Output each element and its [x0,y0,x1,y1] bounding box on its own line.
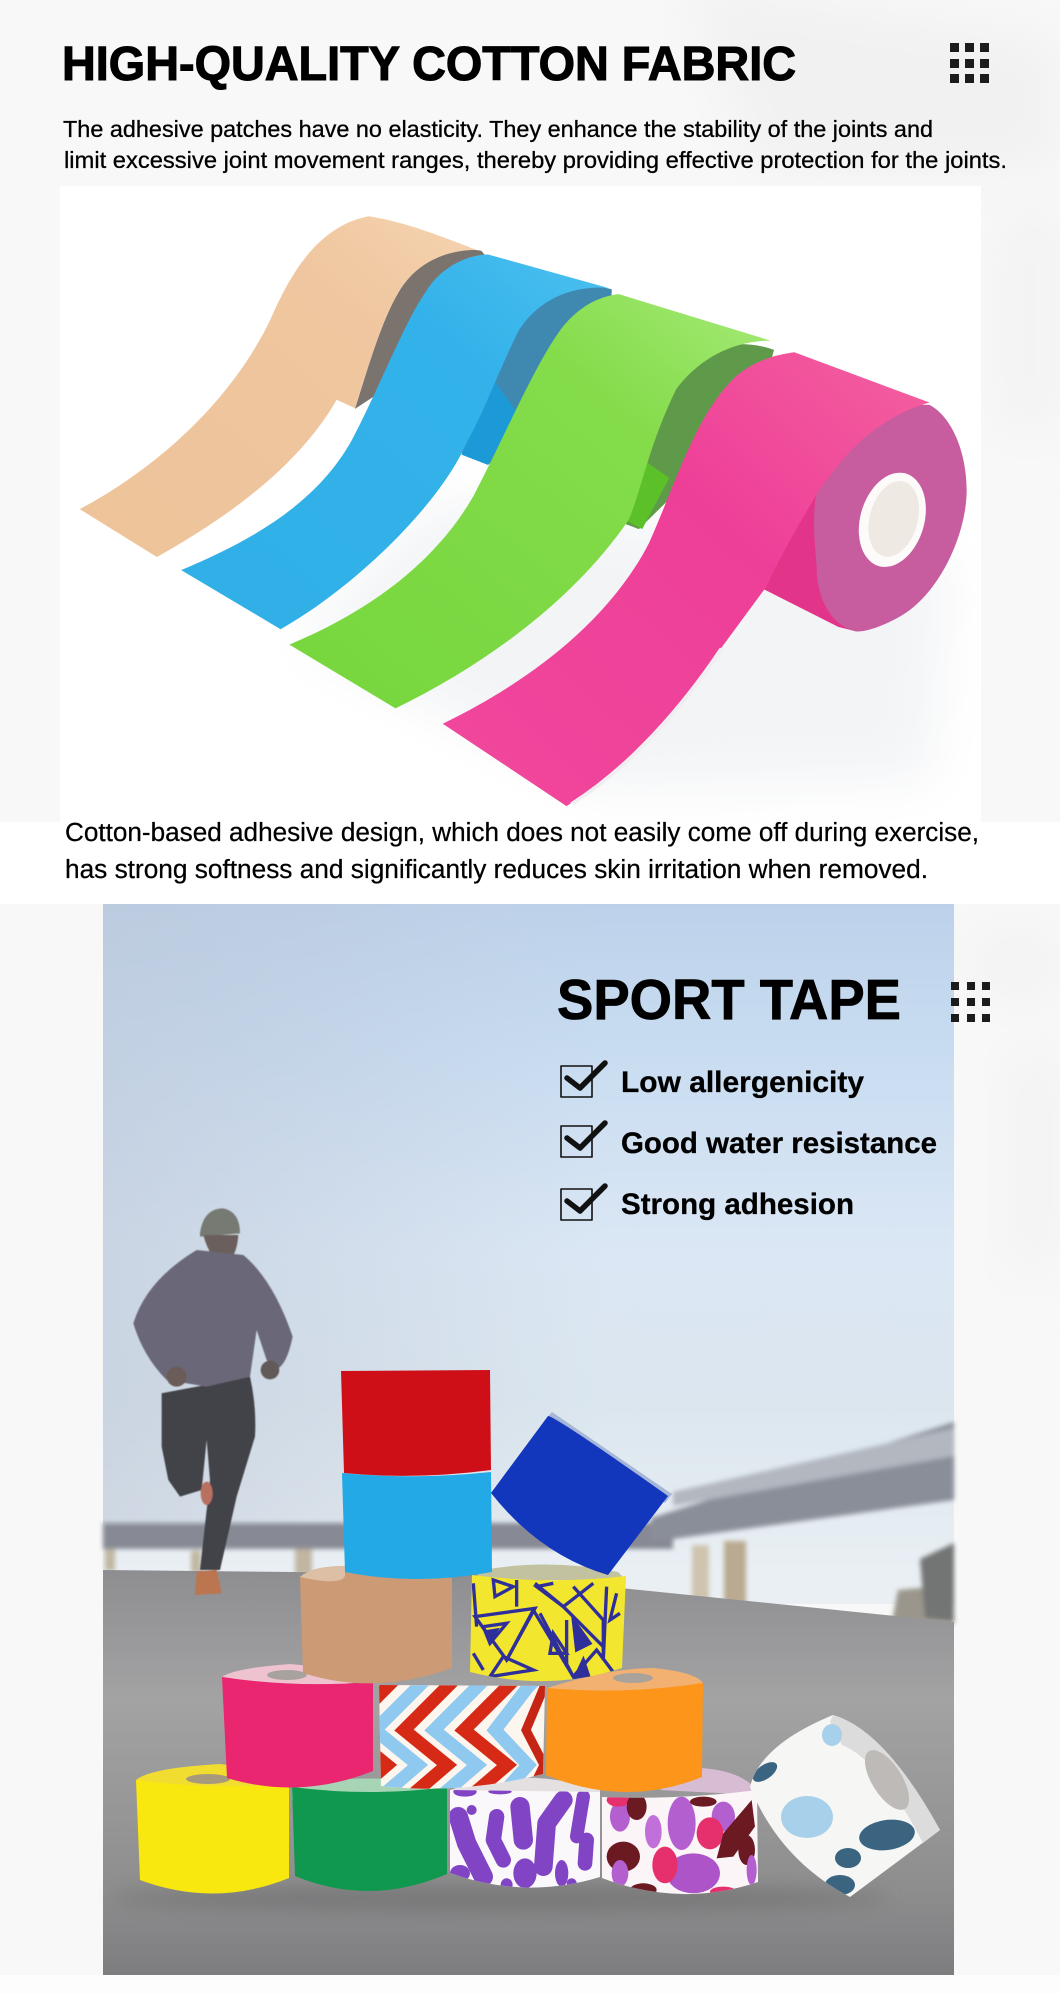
panel: sport tape photo [103,904,954,1975]
royal blue tilted roll [491,1412,672,1575]
text: cotton-based adhesive design: Cotton-based adhesive design, which does not easily come off during exercise, [65,819,979,847]
beige tape roll [80,216,500,557]
tan roll [300,1566,452,1683]
text: cotton-based adhesive design [65,819,979,884]
green tape roll [289,294,774,708]
red roll [341,1370,491,1476]
label: strong adhesion: Strong adhesion [621,1188,854,1221]
road and guard rail background [103,1422,954,1975]
chevron pattern roll [379,1685,545,1789]
text: adhesive patches description: The adhesive patches have no elasticity. They enhance the stability of the joints and [63,116,933,142]
icon: dot grid top [950,43,989,83]
icon: checkbox low allergenicity [561,1063,605,1097]
runner [133,1208,293,1595]
feature list [561,1063,937,1221]
soft shadow under tapes [110,1885,890,1911]
text: cotton-based adhesive design: has strong softness and significantly reduces skin irritation when removed. [65,856,928,884]
icon: dot grid sport tape [951,982,990,1022]
cyan roll [342,1472,492,1579]
yellow roll [136,1764,289,1894]
purple pattern roll [450,1778,600,1892]
orange roll [546,1668,703,1792]
panel: four tape rolls photo [60,186,981,822]
pink roll [222,1664,373,1787]
title: high-quality cotton fabric: HIGH-QUALITY COTTON FABRIC [62,38,796,91]
label: low allergenicity: Low allergenicity [621,1066,865,1099]
text: adhesive patches description: limit excessive joint movement ranges, thereby providing effective protection for the joints. [64,147,1007,173]
label: good water resistance: Good water resistance [621,1127,937,1160]
text: adhesive patches description [63,116,1007,173]
icon: checkbox good water resistance [561,1123,605,1157]
pink camouflage roll [602,1768,758,1897]
pink tape roll [443,352,967,806]
white roll with blue print [750,1715,940,1897]
title: sport tape: SPORT TAPE [557,968,901,1032]
blue tape roll [181,254,612,629]
green roll [292,1778,447,1891]
yellow triangle pattern roll [470,1564,626,1682]
icon: checkbox strong adhesion [561,1186,605,1220]
